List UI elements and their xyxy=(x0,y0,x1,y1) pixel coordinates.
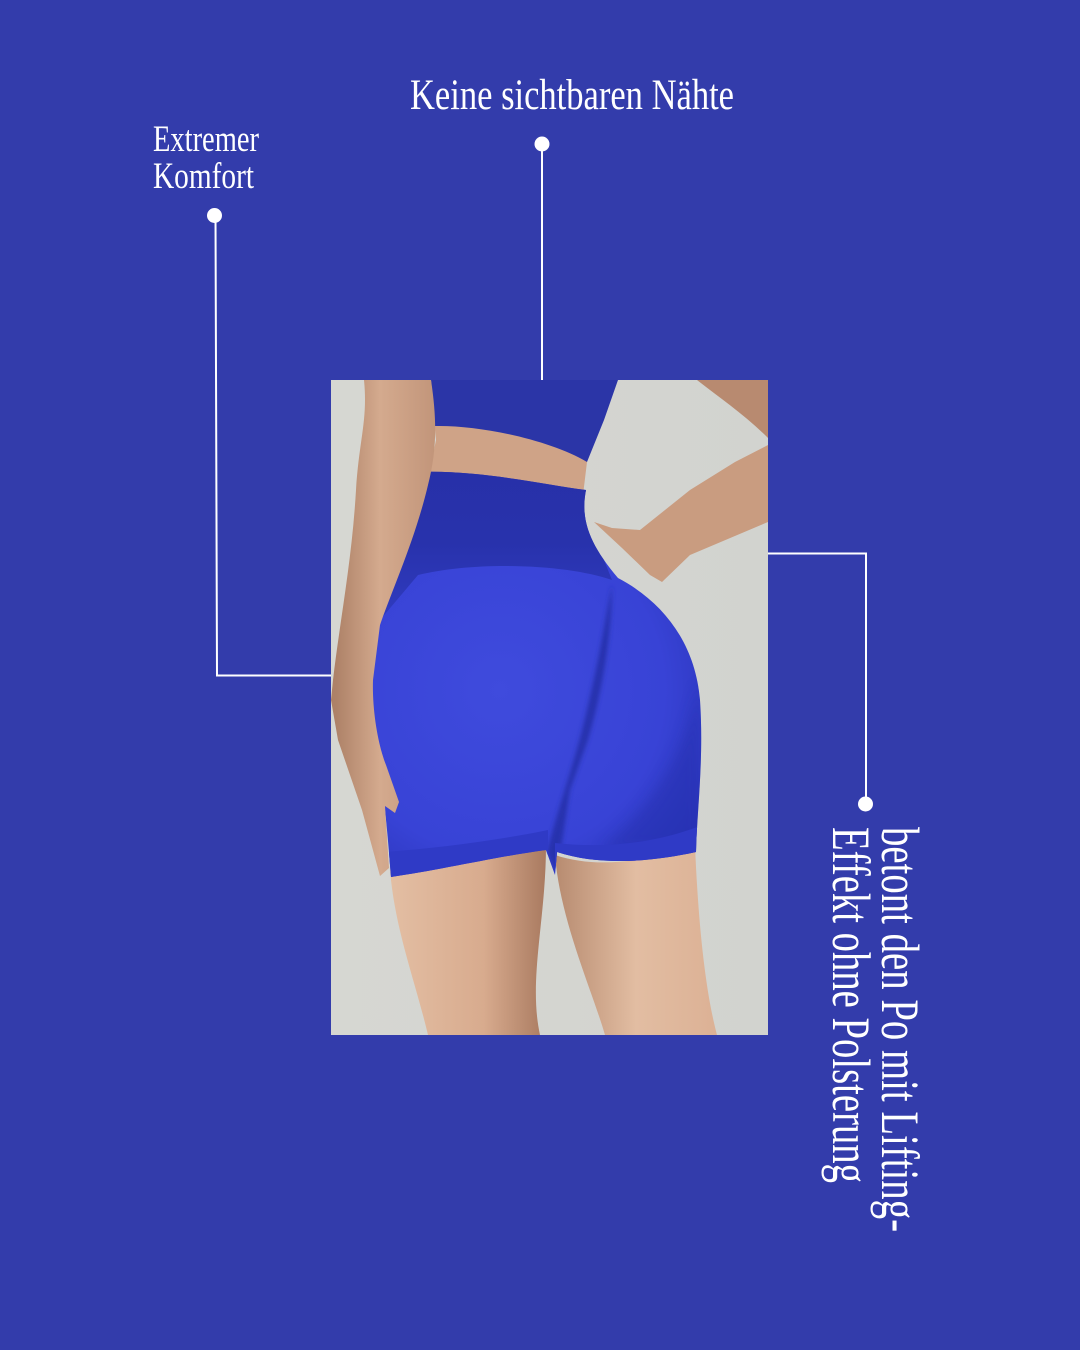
left leg xyxy=(390,845,546,1035)
right leg xyxy=(555,845,717,1035)
right hem band xyxy=(555,826,700,870)
rotated label: betont den Po mit Lifting-Effekt ohne Polsterung: Effekt ohne Polsterung xyxy=(821,827,881,1183)
waistband xyxy=(383,472,612,616)
photo background wall xyxy=(331,380,768,1035)
shorts fabric xyxy=(360,465,710,885)
rotated label: betont den Po mit Lifting-Effekt ohne Polsterung xyxy=(821,827,930,1232)
torso skin xyxy=(431,381,587,490)
label: Extremer Komfort: Extremer xyxy=(153,119,259,160)
center crease shadow xyxy=(547,585,612,875)
upper right arm xyxy=(697,380,768,438)
photo: model wearing blue shorts xyxy=(331,380,768,1035)
top garment xyxy=(431,380,618,462)
label: Extremer Komfort xyxy=(153,119,259,197)
infographic canvas xyxy=(154,78,920,1231)
left arm and hand xyxy=(331,380,435,876)
connector: top callout xyxy=(534,136,550,380)
right side shadow xyxy=(610,705,702,846)
forearm and hand xyxy=(594,445,768,582)
shorts xyxy=(360,465,710,885)
connector: right callout xyxy=(768,554,873,812)
heading: Keine sichtbaren Nähte: Keine sichtbaren Nähte xyxy=(410,72,734,119)
connector: left callout xyxy=(207,208,331,676)
label: Extremer Komfort: Komfort xyxy=(153,156,255,197)
left hem band xyxy=(385,830,548,880)
